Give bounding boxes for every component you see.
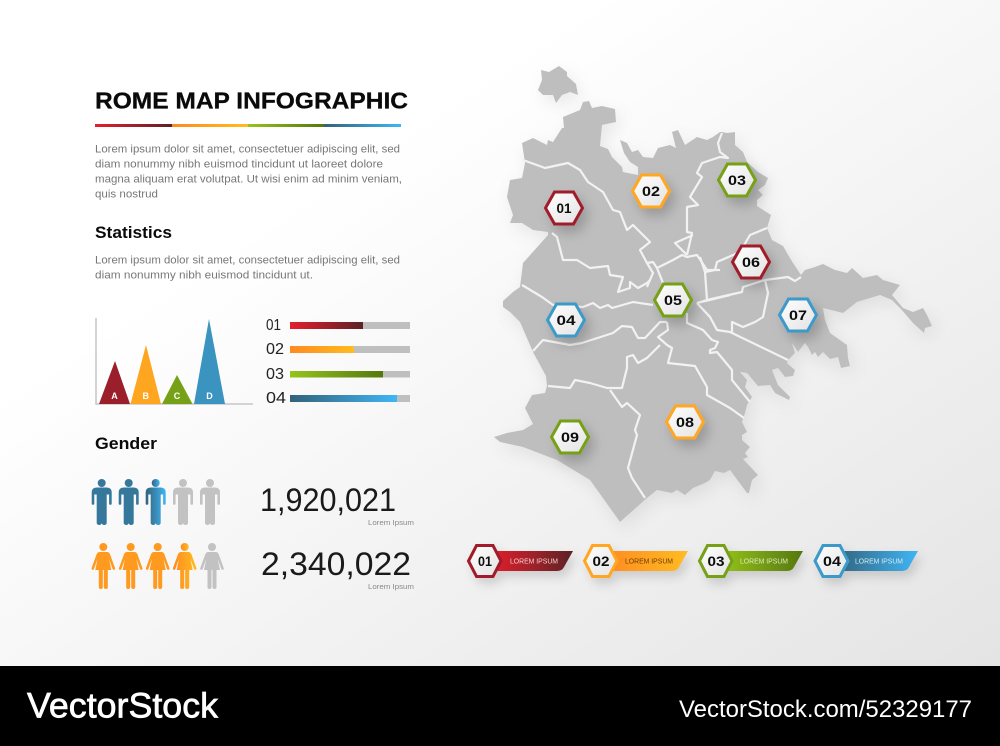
- bar 01: [266, 317, 410, 334]
- district borders: [522, 133, 801, 498]
- marker 09: 09: [561, 429, 579, 445]
- marker 07: [780, 299, 816, 331]
- statistics text block: diam nonummy nibh euismod tincidunt ut.: [95, 270, 313, 282]
- intro text block: [95, 144, 402, 200]
- marker 07: 07: [789, 307, 807, 323]
- legend item 03: [700, 546, 803, 576]
- intro text block: Lorem ipsum dolor sit amet, consectetuer adipiscing elit, sed: [95, 144, 400, 156]
- marker 01: 01: [556, 200, 572, 216]
- female icons row: [92, 543, 224, 589]
- male count: 1,920,021: [260, 482, 396, 518]
- legend item 01: 01: [478, 554, 492, 569]
- bar chart: [266, 317, 410, 407]
- heading: statistics: Statistics: [95, 223, 172, 242]
- legend: [468, 546, 918, 576]
- marker 05: [654, 284, 692, 316]
- triangle C: [162, 375, 192, 404]
- marker 06: [732, 246, 770, 278]
- statistics text block: Lorem ipsum dolor sit amet, consectetuer adipiscing elit, sed: [95, 254, 400, 266]
- heading: gender: Gender: [95, 434, 157, 453]
- legend item 01: LOREM IPSUM: [510, 558, 558, 566]
- bar 02: [266, 341, 410, 358]
- marker 04: 04: [556, 312, 576, 328]
- title: ROME MAP INFOGRAPHIC: [95, 88, 408, 114]
- marker 09: [552, 421, 588, 453]
- statistics text block: [95, 254, 400, 282]
- marker 02: [632, 175, 670, 207]
- marker 03: [718, 164, 756, 196]
- marker 01: [546, 192, 582, 224]
- legend item 02: 02: [592, 554, 610, 569]
- legend item 03: 03: [708, 554, 725, 569]
- watermark url: VectorStock.com/52329177: [679, 696, 972, 723]
- marker 08: [666, 406, 704, 438]
- male icons row: [92, 479, 220, 525]
- bar 02: 02: [266, 341, 284, 358]
- map of Rome: [494, 66, 932, 522]
- watermark band: [0, 666, 1000, 746]
- triangle D: D: [206, 391, 213, 401]
- triangle B: B: [143, 391, 150, 401]
- legend item 04: [815, 546, 918, 576]
- female count: Lorem Ipsum: [368, 582, 414, 591]
- male count: Lorem Ipsum: [368, 518, 414, 527]
- triangle A: [99, 361, 130, 404]
- watermark logo: VectorStock: [27, 686, 219, 726]
- bar 03: 03: [266, 366, 284, 383]
- bar 03: [266, 366, 410, 383]
- legend item 02: LOREM IPSUM: [625, 558, 673, 566]
- triangle B: [130, 345, 161, 404]
- intro text block: magna aliquam erat volutpat. Ut wisi enim ad minim veniam,: [95, 174, 402, 186]
- bar 04: [266, 390, 410, 407]
- legend item 02: [584, 546, 688, 576]
- legend item 04: LOREM IPSUM: [855, 558, 903, 566]
- marker 02: 02: [642, 183, 660, 199]
- legend item 01: [468, 546, 573, 576]
- triangle chart: [96, 318, 253, 404]
- bar 01: 01: [266, 317, 281, 334]
- marker 03: 03: [728, 172, 746, 188]
- marker 05: 05: [664, 292, 682, 308]
- triangle D: [194, 319, 225, 404]
- marker 06: 06: [742, 254, 760, 270]
- marker 08: 08: [676, 414, 694, 430]
- female count: 2,340,022: [261, 546, 411, 582]
- title rule: four colour segments: [95, 124, 401, 127]
- intro text block: quis nostrud: [95, 188, 158, 200]
- marker 04: [548, 304, 584, 336]
- map landmass: [494, 66, 932, 522]
- intro text block: diam nonummy nibh euismod tincidunt ut laoreet dolore: [95, 158, 383, 170]
- triangle A: A: [111, 391, 118, 401]
- legend item 03: LOREM IPSUM: [740, 558, 788, 566]
- bar 04: 04: [266, 390, 286, 407]
- triangle C: C: [174, 391, 181, 401]
- legend item 04: 04: [823, 554, 842, 569]
